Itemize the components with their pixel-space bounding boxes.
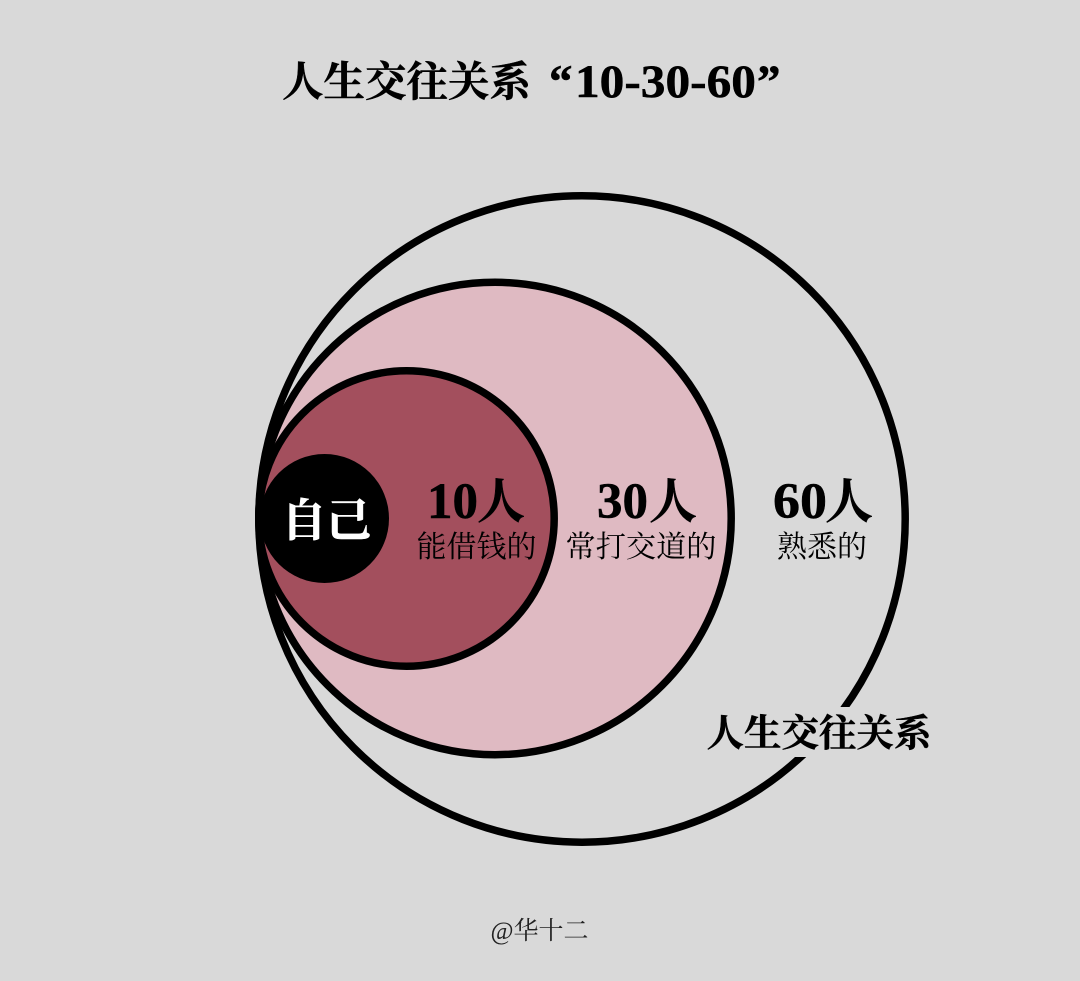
label: 10 people	[416, 474, 536, 564]
label: 10 people: 能借钱的	[416, 531, 536, 564]
self circle	[260, 454, 389, 583]
label: 30 people: 30	[597, 474, 648, 530]
label: 60 people: 60	[773, 474, 827, 530]
label: 10 people: 10	[427, 474, 478, 530]
label: 30 people: 人	[649, 476, 697, 529]
title	[282, 56, 780, 108]
label: 60 people: 人	[825, 476, 873, 529]
middle circle: 30 people	[259, 282, 731, 755]
title: 人生交往关系	[282, 59, 532, 105]
circle diagram	[259, 196, 905, 842]
label: 30 people: 常打交道的	[566, 530, 716, 564]
title: 10-30-60	[575, 56, 756, 108]
label: 30 people	[566, 474, 716, 564]
label: 60 people: 熟悉的	[777, 531, 867, 564]
credit: @华十二	[490, 917, 589, 945]
label: 60 people	[773, 474, 873, 564]
diagram label: life relationships: 人生交往关系	[706, 713, 932, 755]
inner circle: 10 people	[259, 371, 554, 666]
title: ”	[757, 56, 780, 108]
outer circle: 60 people	[259, 196, 905, 842]
label: 10 people: 人	[477, 476, 525, 529]
title: “	[549, 56, 572, 108]
self label: 自己	[281, 496, 372, 546]
